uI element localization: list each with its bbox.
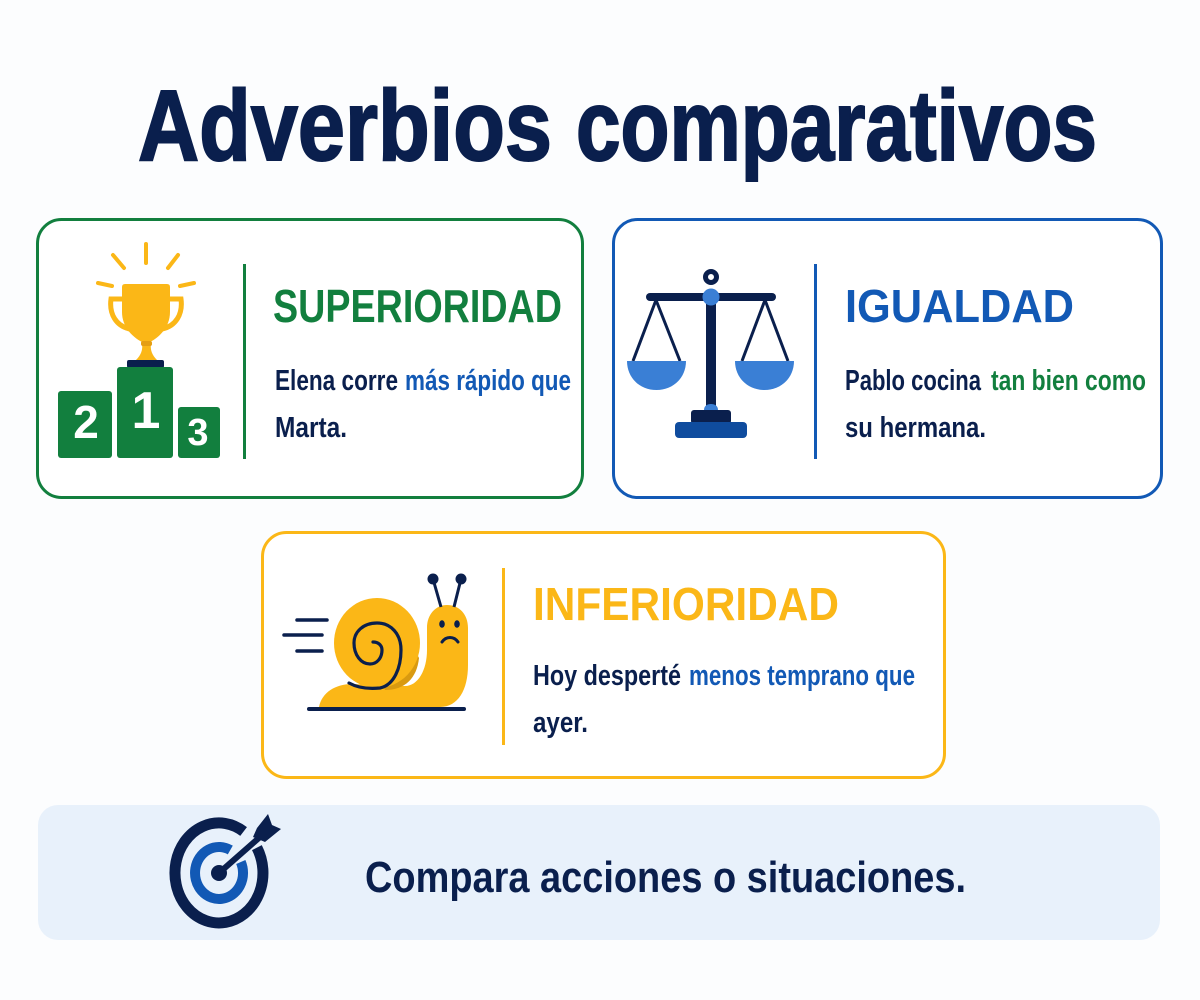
example sentence: superioridad: Elena corre xyxy=(275,365,398,397)
example sentence: igualdad: su hermana. xyxy=(845,412,986,444)
example sentence: inferioridad: ayer. xyxy=(533,707,588,739)
title: Adverbios xyxy=(138,70,552,182)
heading: inferioridad: INFERIORIDAD xyxy=(533,578,839,630)
example sentence: superioridad: Marta. xyxy=(275,412,347,444)
example sentence: igualdad xyxy=(845,365,1146,444)
icon: trophy on podium: 2 xyxy=(73,396,99,448)
panel: inferioridad xyxy=(262,532,944,778)
heading: superioridad: SUPERIORIDAD xyxy=(273,280,562,332)
heading: igualdad: IGUALDAD xyxy=(845,280,1074,332)
icon: balance scale xyxy=(627,272,794,438)
example sentence: igualdad: Pablo cocina xyxy=(845,365,982,397)
example sentence: inferioridad: Hoy desperté xyxy=(533,660,681,692)
panel: igualdad xyxy=(614,220,1162,498)
panel: superioridad xyxy=(38,220,582,498)
icon: trophy on podium: 3 xyxy=(187,412,209,454)
example sentence: igualdad: tan bien como xyxy=(991,365,1146,397)
panel: takeaway banner xyxy=(38,805,1160,940)
example sentence: inferioridad: menos temprano que xyxy=(689,660,915,692)
icon: target with arrow xyxy=(175,814,281,923)
title xyxy=(138,70,1097,182)
example sentence: inferioridad xyxy=(533,660,915,739)
icon: trophy on podium: 1 xyxy=(132,382,160,440)
banner text: Compara acciones o situaciones. xyxy=(365,853,966,902)
example sentence: superioridad: más rápido que xyxy=(405,365,571,397)
example sentence: superioridad xyxy=(275,365,571,444)
icon: trophy on podium xyxy=(58,244,220,458)
icon: sad snail xyxy=(284,574,468,711)
